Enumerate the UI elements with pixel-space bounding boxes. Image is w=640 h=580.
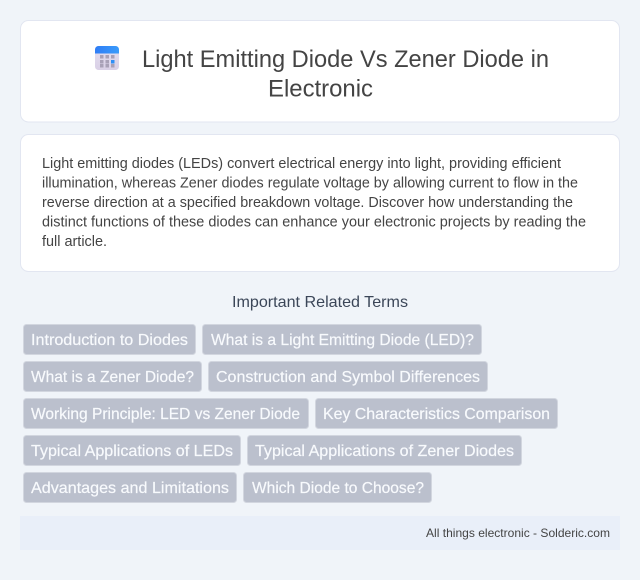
tag: What is a Light Emitting Diode (LED)? [202,324,482,354]
tag: Key Characteristics Comparison [316,398,558,428]
tag: What is a Zener Diode? [24,362,202,392]
tag: Introduction to Diodes: Introduction to Diodes [31,332,188,349]
panel: description: Light emitting diodes (LEDs) convert electrical energy into light, providing efficient [42,156,561,172]
panel: description: reverse direction at a specified breakdown voltage. Discover how understanding the [42,195,573,211]
panel: description: distinct functions of these diodes can enhance your electronic projects by reading the [42,214,586,230]
tag: Typical Applications of Zener Diodes: Typical Applications of Zener Diodes [255,443,514,460]
tag: Introduction to Diodes [24,324,196,354]
tag: Advantages and Limitations: Advantages and Limitations [31,480,229,497]
panel: header [20,20,620,122]
heading: related terms: Important Related Terms [232,294,408,311]
title: Electronic [268,76,373,102]
tag: What is a Light Emitting Diode (LED)?: What is a Light Emitting Diode (LED)? [211,332,474,349]
tag: Advantages and Limitations [24,472,236,502]
panel: description: full article. [42,234,107,250]
tag: Key Characteristics Comparison: Key Characteristics Comparison [323,406,550,423]
footer [20,516,620,550]
tag: What is a Zener Diode?: What is a Zener Diode? [31,369,194,386]
tag: Typical Applications of LEDs: Typical Applications of LEDs [31,443,233,460]
panel: description: illumination, whereas Zener diodes regulate voltage by allowing current to flow in the [42,176,578,192]
tag: Construction and Symbol Differences [208,362,488,392]
panel: description [20,134,620,272]
tag: Construction and Symbol Differences: Construction and Symbol Differences [216,369,480,386]
tag: Typical Applications of Zener Diodes [248,436,522,466]
title: Light Emitting Diode Vs Zener Diode in [142,46,549,73]
tag: Working Principle: Working Principle: LED vs Zener Diode [31,406,300,423]
tag: Which Diode to Choose? [244,472,432,502]
tag: Working Principle [24,398,308,428]
icon: calendar [95,46,119,70]
tag: Typical Applications of LEDs [24,436,240,466]
title [142,46,549,102]
tag: Which Diode to Choose?: Which Diode to Choose? [252,480,424,497]
footer: All things electronic - Solderic.com [426,526,610,540]
